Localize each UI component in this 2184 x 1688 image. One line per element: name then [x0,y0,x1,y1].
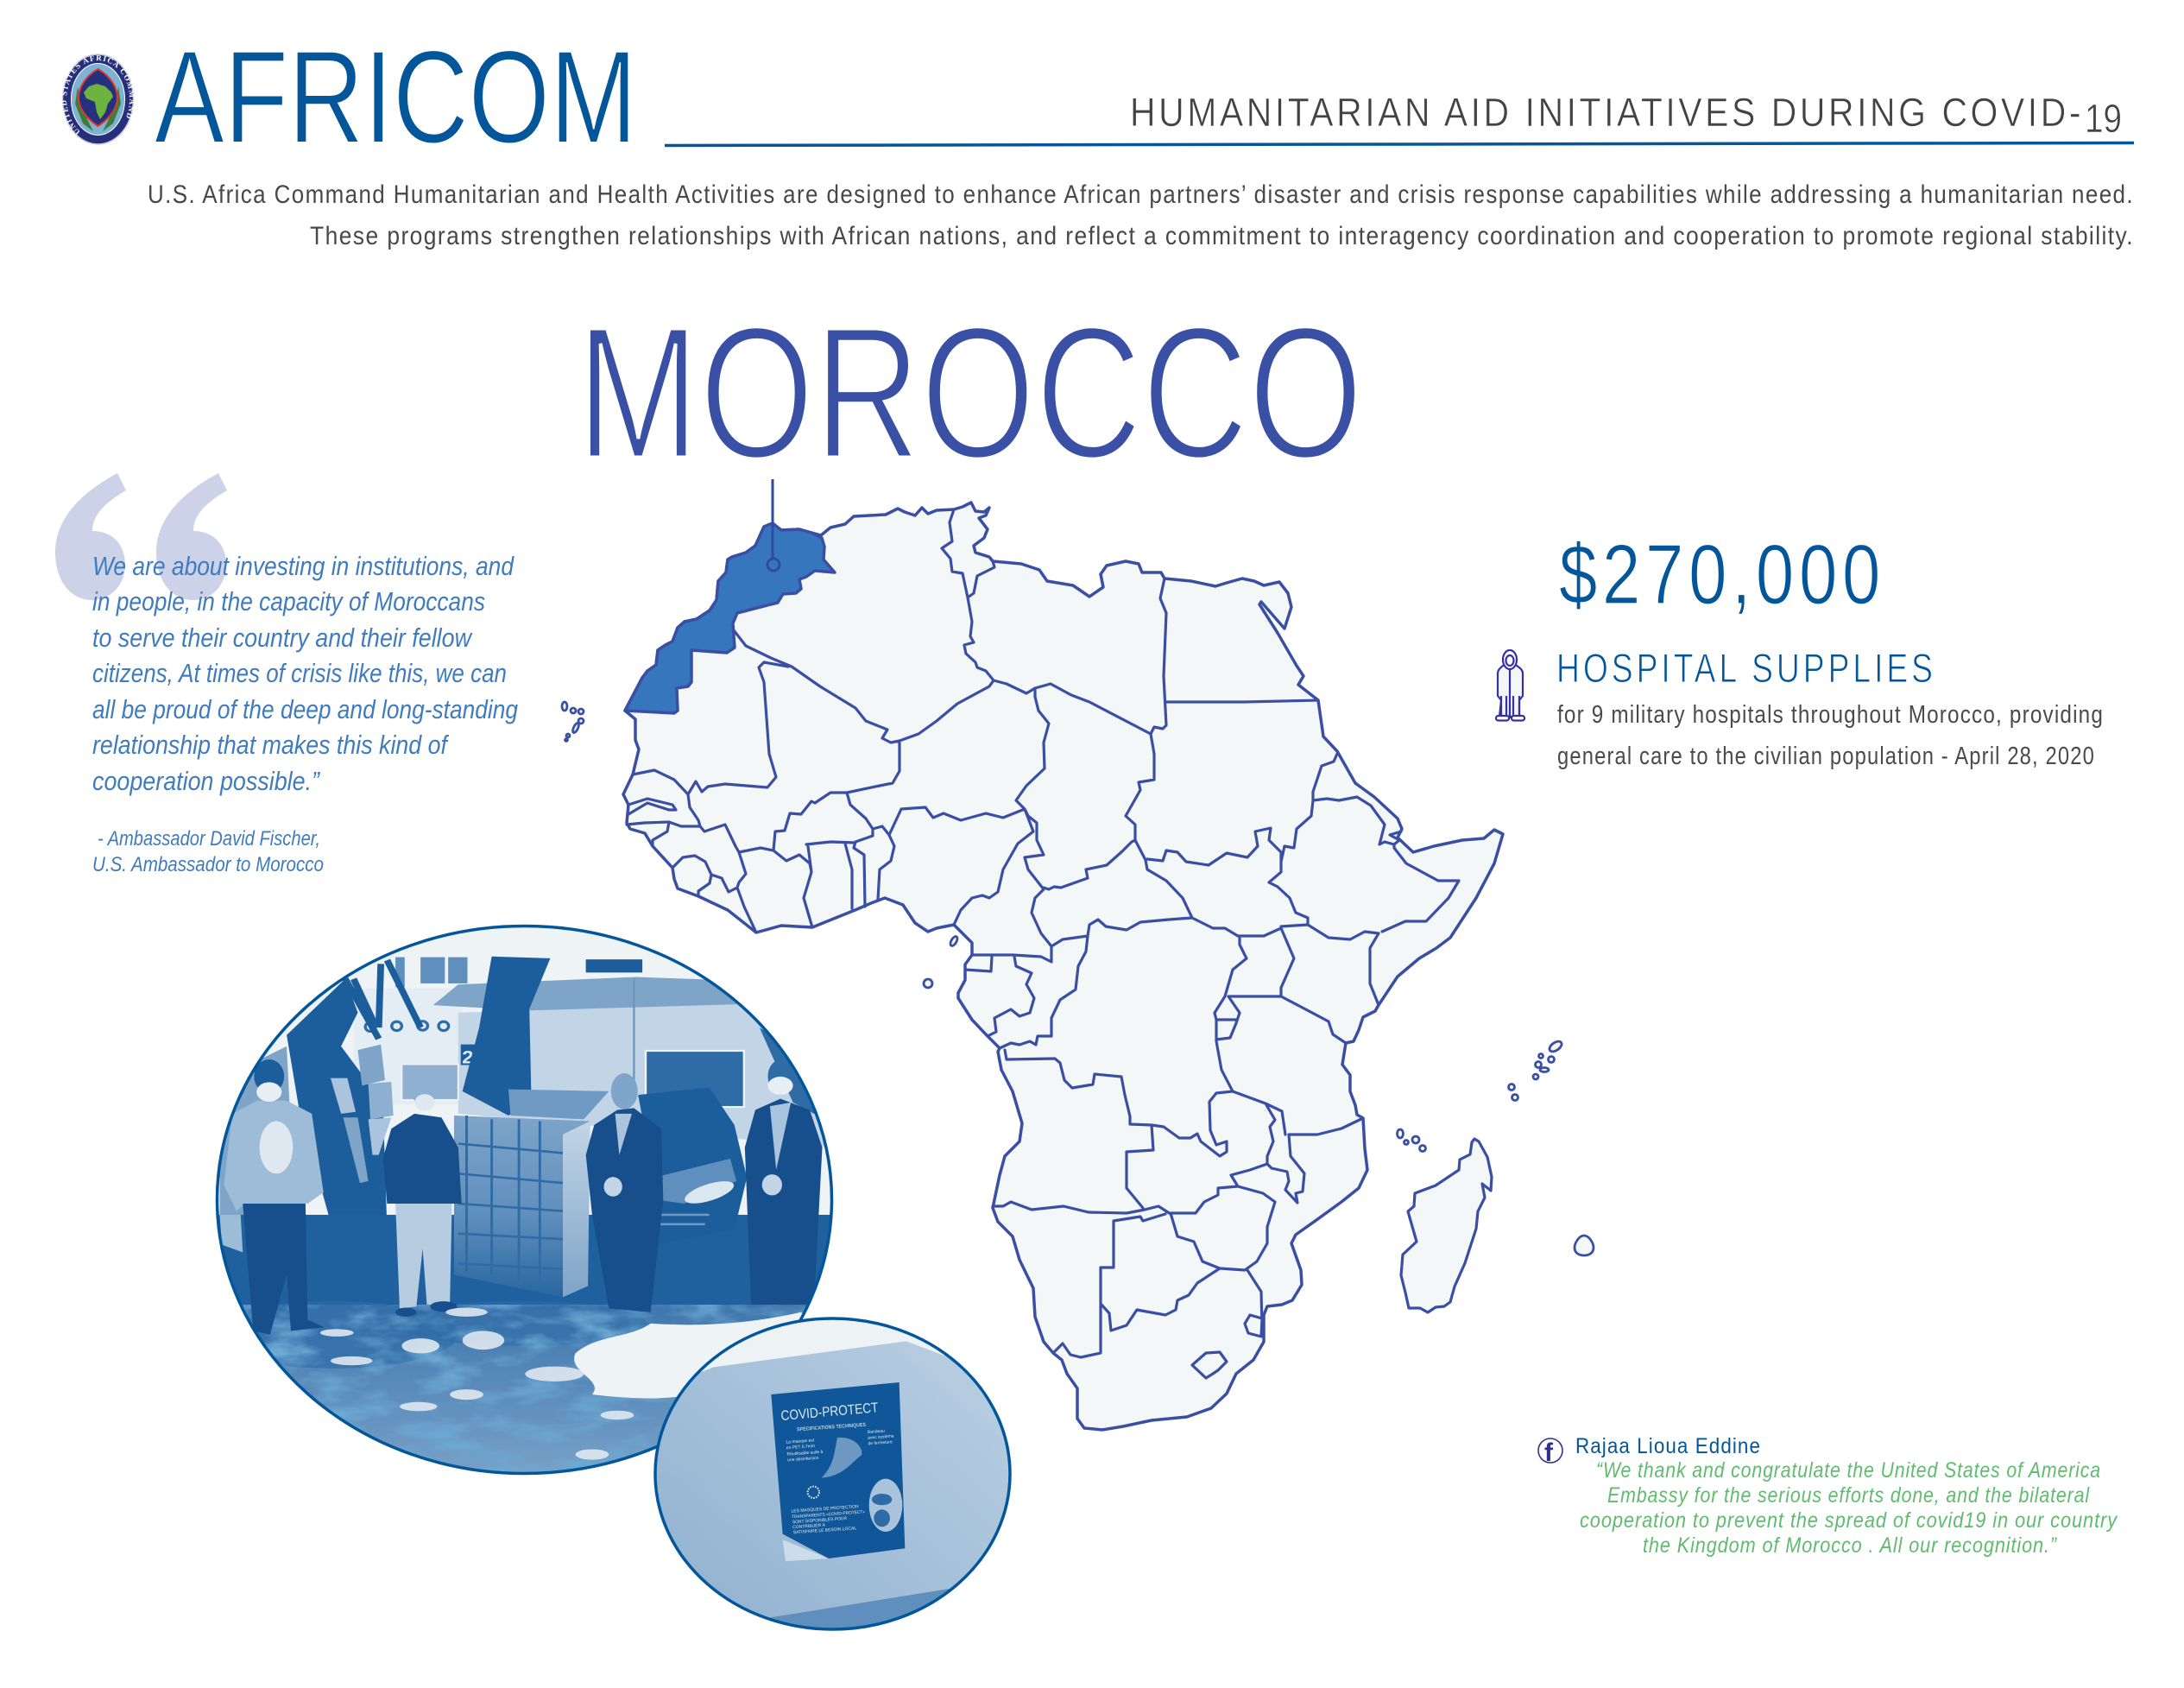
icon: protective suit [1496,650,1524,720]
ambassador quote: all be proud of the deep and long-standing [92,694,518,724]
icon: facebook: f [1544,1438,1554,1467]
map: small islands [562,702,1594,1255]
ambassador quote: citizens, At times of crisis like this, we can [92,658,507,688]
icon: AFRICOM seal: UNITED STATES AFRICA COMMAND [62,55,135,135]
poster: de fermeture [868,1439,893,1446]
comment text [1580,1458,2118,1558]
header rule [665,143,2134,145]
intro paragraph [148,180,2134,250]
ambassador quote: in people, in the capacity of Moroccans [92,586,485,616]
poster: SPECIFICATIONS TECHNIQUES [797,1423,866,1432]
heading: hospital supplies: HOSPITAL SUPPLIES [1556,645,1936,691]
icon: facebook [1538,1438,1562,1467]
quote attribution: U.S. Ambassador to Morocco [92,853,324,876]
comment text: the Kingdom of Morocco . All our recognition.” [1643,1533,2058,1558]
photo outline: main circle [218,926,832,1473]
map: location pin [767,479,780,571]
heading: MOROCCO: MOROCCO [577,288,1363,498]
poster: COVID-PROTECT [780,1400,879,1424]
photo: officials with boxes of supplies [218,927,830,1472]
poster: LES MASQUES DE PROTECTION [791,1504,859,1514]
poster: TRANSPARENTS «COVID-PROTECT» [792,1509,865,1520]
map: land mass [623,503,1503,1430]
amount: $270,000: $270,000 [1559,527,1885,622]
ambassador quote: We are about investing in institutions, and [92,551,514,581]
panel: aid amount [1496,527,2104,770]
ambassador quote: to serve their country and their fellow [92,623,473,653]
poster: SATISFAIRE LE BESOIN LOCAL [793,1526,856,1535]
poster: Réutilisable suite à [786,1450,824,1457]
photo: covid-protect poster [653,1317,1012,1631]
comment text: cooperation to prevent the spread of covid19 in our country [1580,1508,2118,1533]
map: country borders [627,509,1459,1357]
commenter name: Rajaa Lioua Eddine [1575,1434,1761,1458]
quote attribution: - Ambassador David Fischer, [98,827,320,850]
decorative quotation mark [55,473,227,600]
comment text: Embassy for the serious efforts done, and the bilateral [1607,1483,2090,1508]
map: Madagascar [1401,1139,1492,1312]
poster: Bandeau [868,1429,885,1435]
map: Morocco highlighted [625,523,835,713]
poster: SONT DISPONIBLES POUR [792,1516,848,1525]
title: AFRICOM: AFRICOM [155,23,637,171]
poster: avec système [868,1434,894,1441]
poster: une désinfection [787,1456,819,1463]
poster: La masque est [786,1438,815,1445]
poster: CONTRIBUER À [792,1522,826,1530]
map: Lesotho [1192,1352,1227,1378]
photo: officials with boxes of supplies: 2 [462,1046,474,1067]
quote attribution [92,827,324,876]
comment text: “We thank and congratulate the United States of America [1596,1458,2101,1483]
poster: en PET 0,7mm [786,1444,815,1451]
subtitle: humanitarian aid initiatives: 19 [2085,96,2122,141]
poster [771,1382,905,1558]
map of Africa [562,479,1594,1430]
subtitle: humanitarian aid initiatives: HUMANITARIAN AID INITIATIVES DURING COVID- [1130,90,2084,135]
ambassador quote [92,551,518,876]
header [62,23,2134,250]
panel: facebook comment [1538,1434,2118,1558]
ambassador quote: relationship that makes this kind of [92,730,450,760]
ambassador quote: cooperation possible.” [92,766,320,796]
supplies description [1557,701,2104,770]
